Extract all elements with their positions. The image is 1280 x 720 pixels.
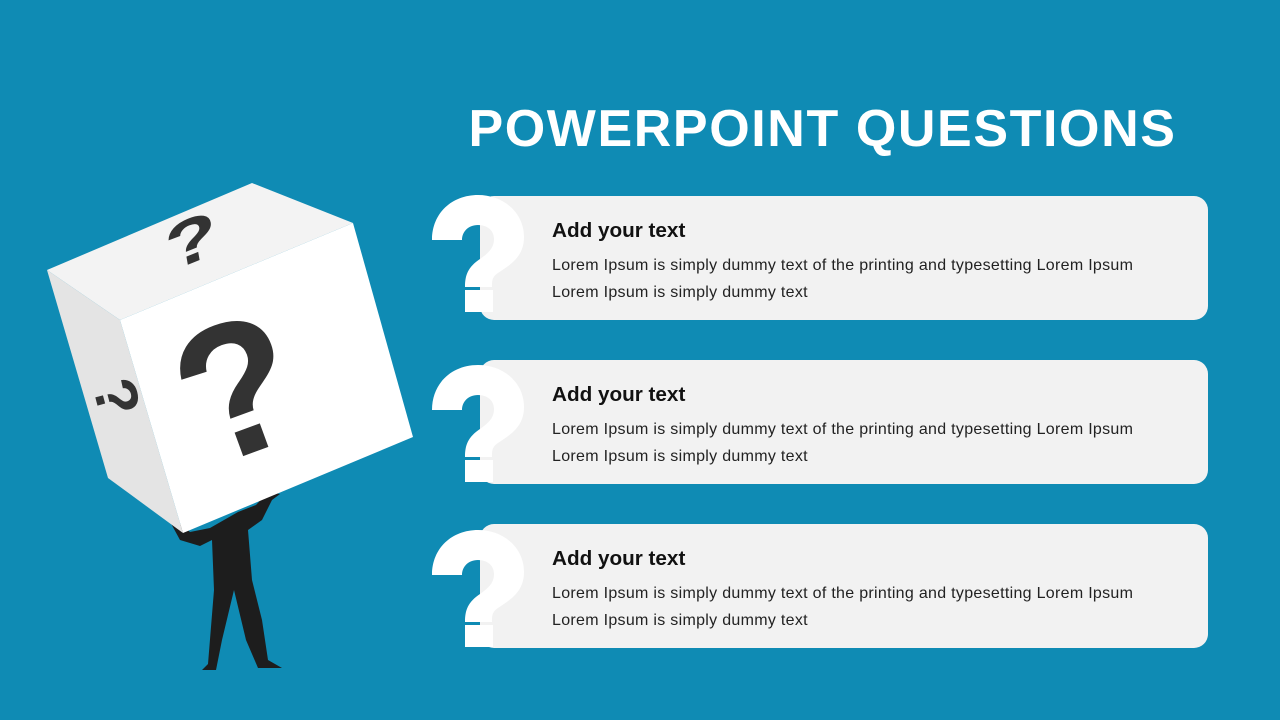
card 3 <box>480 524 1208 648</box>
figure silhouette <box>168 492 282 670</box>
cube question marks: ? <box>147 270 328 509</box>
card 1: Lorem Ipsum is simply dummy text of the printing and typesetting Lorem Ipsum <box>552 257 1133 274</box>
illustration: man carrying question cube <box>47 183 413 670</box>
cube front face <box>120 223 413 533</box>
icon: question mark 3 <box>432 530 524 647</box>
card 2: Lorem Ipsum is simply dummy text <box>552 448 808 465</box>
card 1: Add your text <box>552 219 685 242</box>
card 2: Add your text <box>552 383 685 406</box>
title: POWERPOINT QUESTIONS <box>468 100 1177 158</box>
cube left face <box>47 270 183 533</box>
icon: question mark 1 <box>432 195 524 312</box>
card 3: Lorem Ipsum is simply dummy text <box>552 612 808 629</box>
card 2 <box>480 360 1208 484</box>
card 3: Lorem Ipsum is simply dummy text of the printing and typesetting Lorem Ipsum <box>552 585 1133 602</box>
cube question marks <box>79 197 328 509</box>
cube question marks: ? <box>160 197 223 286</box>
card 1 <box>480 196 1208 320</box>
card 2: Lorem Ipsum is simply dummy text of the printing and typesetting Lorem Ipsum <box>552 421 1133 438</box>
cube top face <box>47 183 353 320</box>
cube question marks: ? <box>79 371 154 424</box>
card 3: Add your text <box>552 547 685 570</box>
card 1: Lorem Ipsum is simply dummy text <box>552 284 808 301</box>
icon: question mark 2 <box>432 365 524 482</box>
